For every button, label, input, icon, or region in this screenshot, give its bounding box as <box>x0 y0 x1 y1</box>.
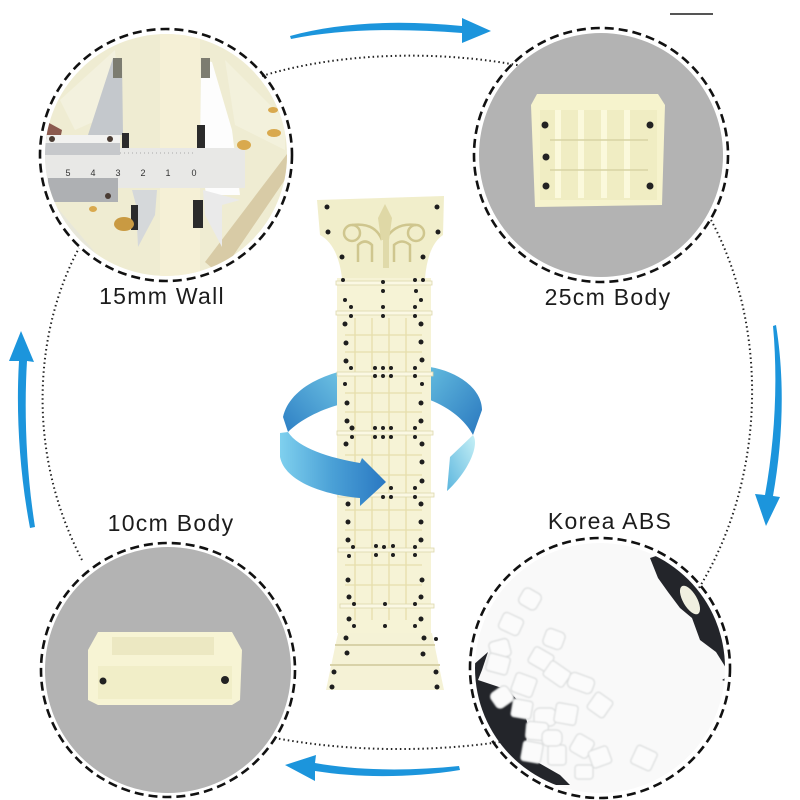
arrow: left blue <box>9 331 35 528</box>
dotted connecting ring <box>43 56 752 749</box>
arrow: bottom blue <box>285 755 460 781</box>
dashed circle: bottom right <box>470 538 730 798</box>
capital ornament <box>344 225 424 262</box>
dashed circle: top right <box>474 28 728 282</box>
rotation arrow: front left with head <box>280 432 386 506</box>
shaft ribs <box>336 281 434 608</box>
rotation arrow: back right <box>430 367 482 435</box>
rotation arrow: back left <box>283 372 338 432</box>
caliper numbers: 5 <box>65 168 71 178</box>
clips <box>324 204 440 690</box>
scale bar <box>45 148 245 188</box>
panel: 10cm body photo <box>45 547 291 793</box>
arrow: top blue <box>290 18 491 43</box>
caliper numbers: 0 <box>191 168 197 178</box>
caliper numbers: 1 <box>165 168 171 178</box>
label: 15mm Wall: 15mm Wall <box>99 283 225 309</box>
caliper jaws <box>88 58 123 135</box>
panel: 15mm wall caliper photo <box>40 30 295 285</box>
pellets <box>485 586 658 779</box>
shaft grid <box>345 318 422 620</box>
caliper numbers: 3 <box>115 168 121 178</box>
caliper numbers <box>65 168 197 178</box>
dashed circle: top left <box>40 29 292 281</box>
column mould <box>317 196 444 690</box>
panel: Korea ABS pellets photo <box>475 556 725 785</box>
spots <box>237 140 251 150</box>
dark backing areas <box>650 556 725 666</box>
caliper numbers: 2 <box>140 168 146 178</box>
rotation arrow: front right <box>447 435 475 491</box>
label: 25cm Body: 25cm Body <box>545 284 671 310</box>
panel: 25cm body photo <box>479 33 723 277</box>
label: 10cm Body: 10cm Body <box>108 510 234 536</box>
label: Korea ABS: Korea ABS <box>548 508 672 534</box>
caliper numbers: 4 <box>90 168 96 178</box>
small dark line top right <box>670 13 713 15</box>
arrow: right blue <box>755 325 782 526</box>
dashed circle: bottom left <box>41 543 295 797</box>
